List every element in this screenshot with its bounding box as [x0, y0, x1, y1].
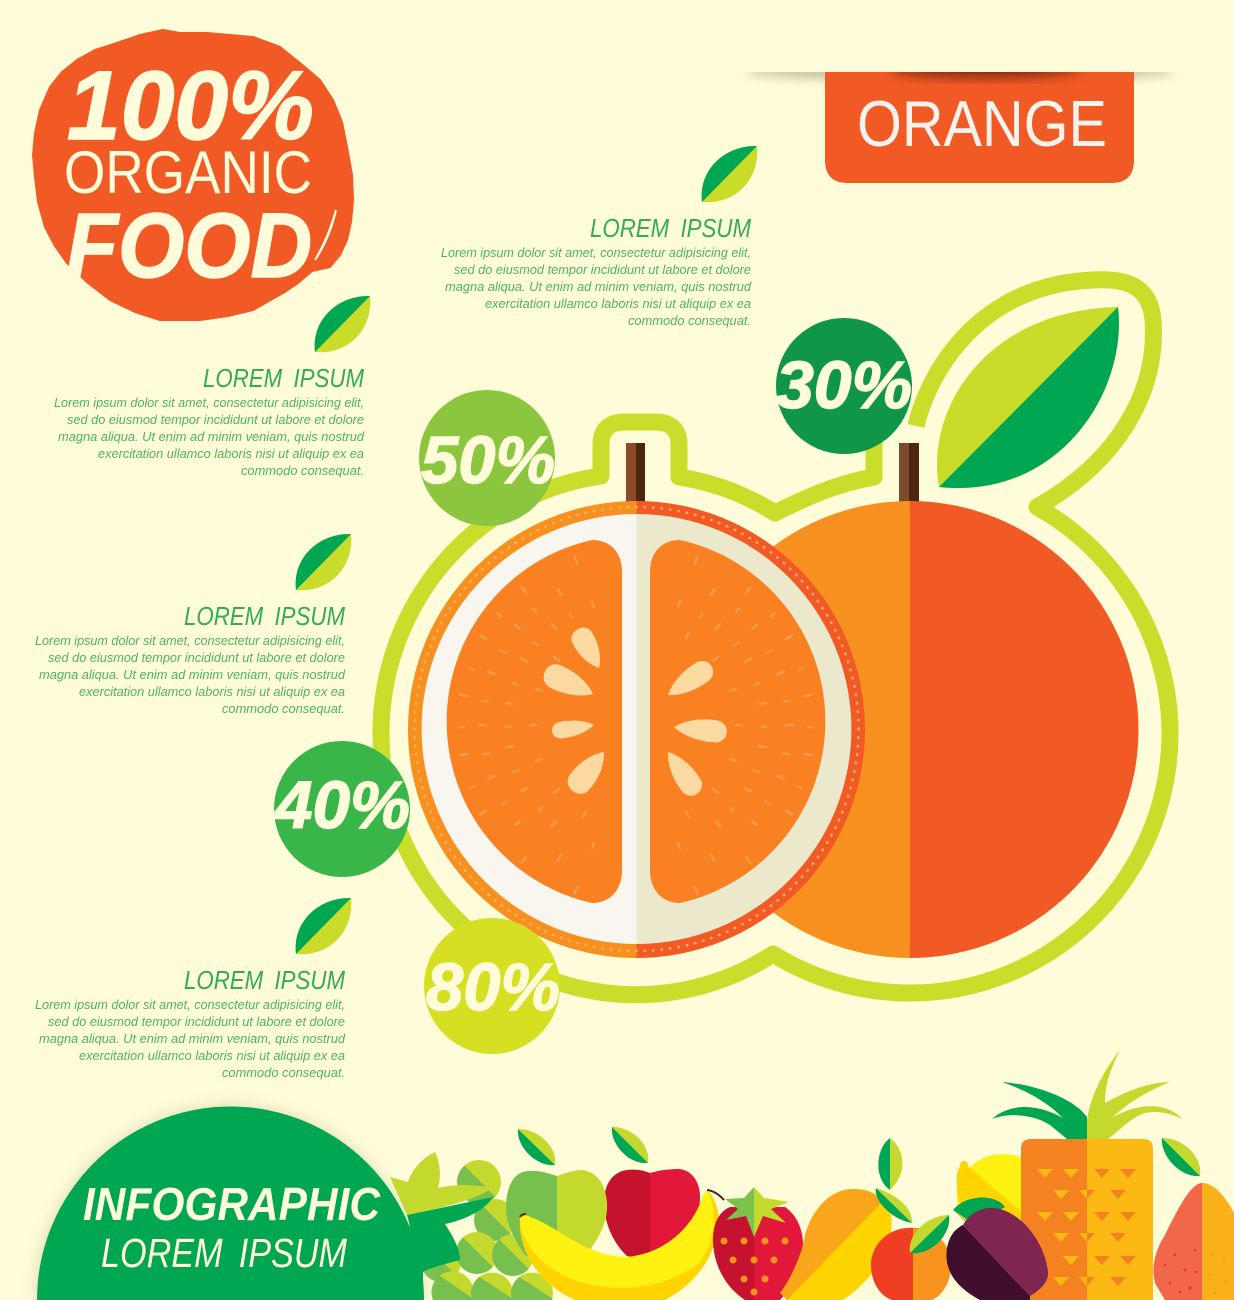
tab: orange title: ORANGE — [857, 87, 1107, 160]
text block: top: exercitation ullamco laboris nisi ut aliquip ex ea — [485, 296, 751, 311]
fruit: lemon — [957, 1154, 1049, 1240]
text block: left lower: commodo consequat. — [222, 1065, 345, 1080]
text block: left middle: sed do eiusmod tempor incididunt ut labore et dolore — [48, 650, 345, 665]
fruit: peach — [871, 1215, 951, 1300]
cut orange — [408, 443, 865, 958]
fruit: strawberry — [713, 1187, 803, 1300]
text block: left lower: sed do eiusmod tempor incididunt ut labore et dolore — [48, 1014, 345, 1029]
text block: left middle: LOREM IPSUM — [184, 601, 345, 631]
badge: 50% — [419, 390, 555, 526]
text block: left upper: Lorem ipsum dolor sit amet, consectetur adipisicing elit, — [54, 395, 364, 410]
badge: 50%: 50% — [421, 423, 555, 498]
text block: top — [441, 146, 757, 328]
text block: top: commodo consequat. — [628, 313, 751, 328]
text block: left upper: LOREM IPSUM — [203, 363, 364, 393]
whole orange — [682, 307, 1138, 958]
fruit: plum — [946, 1198, 1048, 1300]
badge: 100% organic food: ORGANIC — [64, 139, 312, 206]
fruit: banana — [520, 1190, 724, 1300]
fruit: grapes — [421, 1160, 553, 1300]
badge: 80% — [424, 918, 560, 1054]
text block: left middle: Lorem ipsum dolor sit amet, consectetur adipisicing elit, — [35, 633, 345, 648]
text block: left lower: magna aliqua. Ut enim ad minim veniam, quis nostrud — [39, 1031, 346, 1046]
text block: top: magna aliqua. Ut enim ad minim veniam, quis nostrud — [445, 279, 752, 294]
text block: top: Lorem ipsum dolor sit amet, consectetur adipisicing elit, — [441, 245, 751, 260]
fruit: green apple — [506, 1129, 607, 1270]
badge: 100% organic food: 100% — [67, 51, 314, 160]
text block: top: LOREM IPSUM — [590, 213, 751, 243]
text block: left lower: exercitation ullamco laboris nisi ut aliquip ex ea — [79, 1048, 345, 1063]
text block: top: sed do eiusmod tempor incididunt ut labore et dolore — [454, 262, 751, 277]
text block: left upper: magna aliqua. Ut enim ad minim veniam, quis nostrud — [58, 429, 365, 444]
badge: 40% — [273, 741, 410, 877]
text block: left middle — [35, 534, 351, 716]
fruit outline contour — [381, 280, 1170, 995]
text block: left upper — [54, 296, 370, 478]
text block: left upper: commodo consequat. — [241, 463, 364, 478]
text block: left middle: magna aliqua. Ut enim ad minim veniam, quis nostrud — [39, 667, 346, 682]
fruit row — [421, 1050, 1234, 1300]
tab: orange title — [746, 72, 1174, 183]
fruit: pear — [1153, 1138, 1234, 1300]
text block: left middle: exercitation ullamco laboris nisi ut aliquip ex ea — [79, 684, 345, 699]
text block: left lower: LOREM IPSUM — [184, 965, 345, 995]
text block: left upper: sed do eiusmod tempor incididunt ut labore et dolore — [67, 412, 364, 427]
fruit: mango — [780, 1138, 912, 1300]
badge: 30% — [776, 318, 912, 454]
circle: infographic banner: LOREM IPSUM — [101, 1230, 348, 1276]
text block: left upper: exercitation ullamco laboris nisi ut aliquip ex ea — [98, 446, 364, 461]
text block: left lower — [35, 898, 351, 1080]
badge: 40%: 40% — [273, 768, 410, 843]
badge: 30%: 30% — [776, 348, 912, 423]
badge: 100% organic food — [33, 30, 353, 320]
fruit: red apple — [604, 1127, 700, 1262]
circle: infographic banner — [33, 1103, 493, 1300]
fruit: pineapple — [992, 1050, 1182, 1300]
text block: left lower: Lorem ipsum dolor sit amet, consectetur adipisicing elit, — [35, 997, 345, 1012]
text block: left middle: commodo consequat. — [222, 701, 345, 716]
badge: 80%: 80% — [426, 950, 560, 1025]
badge: 100% organic food: FOOD — [66, 195, 312, 297]
circle: infographic banner: INFOGRAPHIC — [83, 1178, 381, 1230]
